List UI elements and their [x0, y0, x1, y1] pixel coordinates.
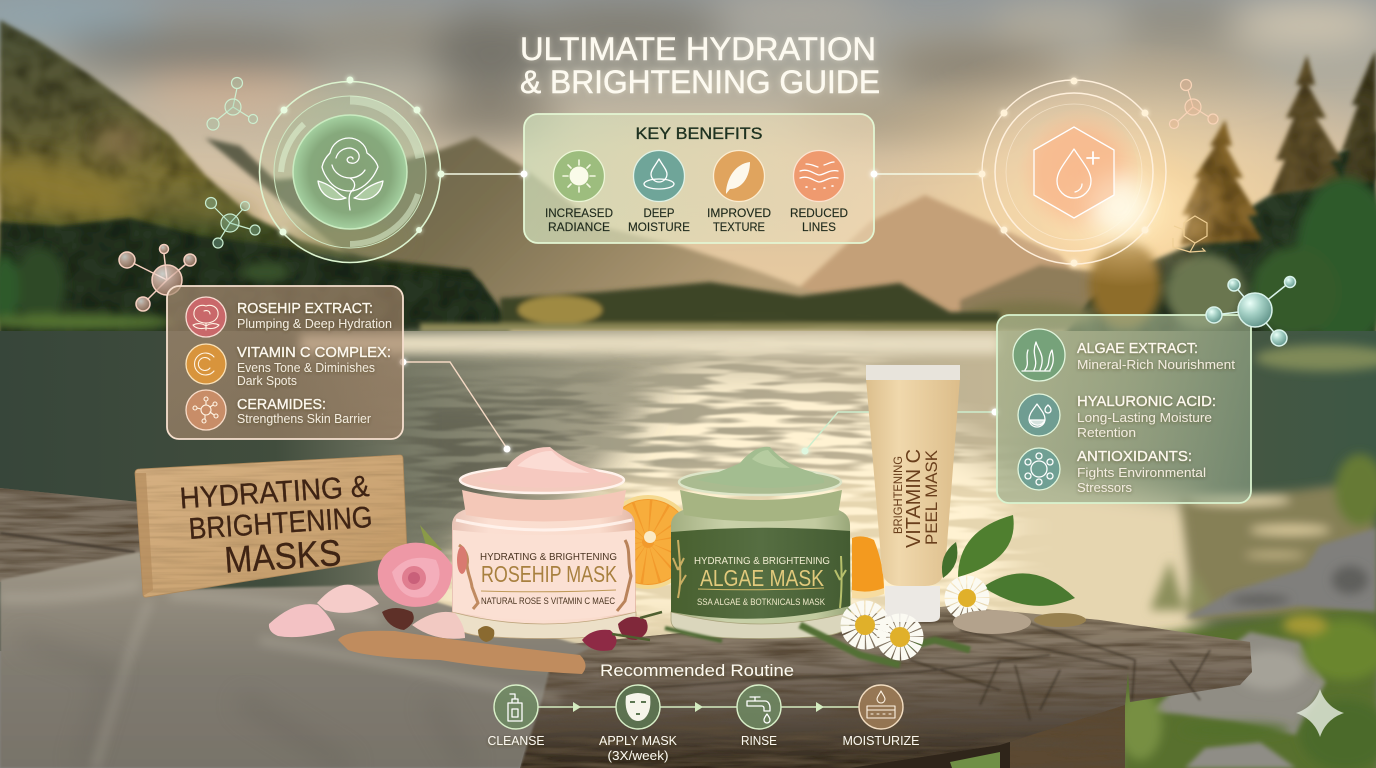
icon: reduced lines [794, 150, 844, 202]
molecule: hexagon ring [1173, 216, 1207, 252]
ring nodes [978, 78, 1148, 266]
jar: algae mask [671, 447, 851, 638]
text: ingredients: Strengthens Skin Barrier [237, 412, 371, 426]
icon: texture feather [714, 150, 764, 202]
text: ingredients: Plumping & Deep Hydration [237, 317, 392, 331]
tube text: BRIGHTENING [893, 456, 905, 534]
left forested mountain [0, 20, 510, 335]
icon: rose [318, 138, 383, 210]
emblem: hexagon droplet [978, 78, 1166, 266]
tube text [893, 449, 941, 548]
icon: antioxidants [1018, 448, 1060, 490]
molecule: teal glass [1206, 276, 1296, 346]
text: ingredients: ALGAE EXTRACT: [1077, 340, 1198, 357]
icon: droplet in hexagon [1034, 127, 1114, 218]
labels: benefits: DEEP [644, 206, 674, 220]
rosehip label: ROSEHIP MASK [481, 561, 618, 587]
molecule: top left [207, 78, 258, 130]
icon: rinse faucet [737, 685, 781, 729]
panel: algae ingredients [997, 315, 1251, 503]
leaves [958, 515, 1014, 577]
routine labels: (3X/week) [608, 748, 668, 763]
labels: benefits: LINES [802, 220, 836, 234]
right forest [965, 50, 1376, 347]
icon: moisture drop [634, 150, 684, 202]
linen cloth [0, 552, 590, 768]
petals [269, 604, 335, 637]
text: ingredients [1077, 340, 1236, 495]
icon: ceramides [186, 390, 226, 430]
sparkle mark [1296, 689, 1344, 737]
wooden spoon [338, 631, 586, 674]
routine heading: Recommended Routine [600, 661, 794, 680]
tube text: VITAMIN C [903, 449, 925, 548]
clouds [0, 0, 1376, 204]
text: ingredients: CERAMIDES: [237, 396, 326, 413]
algae label: SSA ALGAE & BOTKNICALS MASK [697, 597, 826, 608]
labels: benefits: TEXTURE [713, 220, 765, 234]
text: ingredients: HYALURONIC ACID: [1077, 393, 1216, 410]
far shoreline trees [420, 282, 1000, 332]
text: ingredients: Fights Environmental [1077, 466, 1206, 480]
connector lines between emblems and benefits [441, 173, 982, 175]
tube text: PEEL MASK [922, 449, 941, 545]
labels: benefits: MOISTURE [628, 220, 690, 234]
sign text [179, 470, 376, 583]
algae label: HYDRATING & BRIGHTENING [694, 555, 830, 567]
routine labels: RINSE [741, 733, 777, 748]
routine labels: CLEANSE [488, 733, 545, 748]
labels: benefits: INCREASED [545, 206, 613, 220]
panel: key benefits [520, 114, 878, 243]
distant mountains [205, 137, 1120, 330]
labels: benefits: RADIANCE [548, 220, 610, 234]
jar: rosehip mask [452, 447, 636, 638]
text: ingredients: Long-Lasting Moisture [1077, 411, 1212, 425]
title: ULTIMATE HYDRATION [520, 31, 876, 67]
text: ingredients: Dark Spots [237, 374, 297, 388]
connector: left panel to rosehip jar [400, 358, 510, 452]
orange slices [601, 495, 884, 598]
icon: vitamin c [186, 344, 226, 384]
text: ingredients: ANTIOXIDANTS: [1077, 448, 1192, 465]
icon: hyaluronic drop [1018, 394, 1060, 436]
rosehip label: NATURAL ROSE S VITAMIN C MAEC [481, 596, 615, 607]
routine arrows [538, 702, 859, 712]
algae label [671, 528, 850, 619]
rosehip label: HYDRATING & BRIGHTENING [480, 551, 617, 563]
daisies [848, 583, 982, 653]
icon: radiance sun [554, 150, 604, 202]
ring nodes [280, 76, 444, 236]
icon: moisturize [859, 685, 903, 729]
lower right water reflection [1150, 454, 1376, 620]
text: ingredients: ROSEHIP EXTRACT: [237, 300, 373, 317]
routine labels: MOISTURIZE [842, 733, 920, 748]
icon: cleanse bottle [494, 685, 538, 729]
icon: apply mask [616, 685, 660, 729]
routine labels: APPLY MASK [599, 733, 677, 748]
title: & BRIGHTENING GUIDE [520, 64, 880, 100]
left wooden planks [0, 488, 140, 582]
rosehip label [453, 530, 635, 620]
rose [378, 525, 452, 607]
molecule: pink glass [119, 244, 196, 311]
dried buds and herb sprigs [382, 608, 970, 665]
wooden sign [135, 455, 407, 597]
labels: benefits: IMPROVED [707, 206, 771, 220]
lake water [0, 331, 1376, 651]
water ripples [420, 365, 1010, 620]
title [520, 31, 880, 100]
text: ingredients: Stressors [1077, 481, 1132, 495]
molecule: mid left [206, 198, 260, 248]
heading: key benefits: KEY BENEFITS [636, 124, 762, 143]
routine labels [488, 733, 920, 763]
stones [953, 610, 1031, 634]
labels: benefits [545, 206, 848, 234]
panel: rosehip ingredients [167, 286, 403, 439]
text: ingredients: VITAMIN C COMPLEX: [237, 344, 391, 361]
sun glitter base on the water [360, 470, 1200, 650]
emblem: rose [260, 76, 444, 262]
text: ingredients: Mineral-Rich Nourishment [1077, 358, 1236, 372]
connector: right panel to algae tube [802, 408, 998, 454]
text: ingredients: Evens Tone & Diminishes [237, 361, 375, 375]
right bank: rocks and foliage [1118, 528, 1376, 768]
table wood [520, 606, 1252, 768]
text: ingredients: Retention [1077, 426, 1136, 440]
sign text: BRIGHTENING [188, 501, 373, 546]
sign text: HYDRATING & [179, 470, 370, 516]
algae label: ALGAE MASK [700, 565, 825, 591]
molecule: top right [1170, 80, 1218, 128]
labels: benefits: REDUCED [790, 206, 848, 220]
icon: algae [1013, 329, 1065, 381]
icon: rose [186, 297, 226, 337]
section: recommended routine [488, 661, 920, 763]
sign text: MASKS [223, 532, 342, 581]
tube: vitamin c peel mask [866, 365, 960, 622]
text: ingredients [237, 300, 392, 426]
props: rose, petals, spoon, flowers, stone [269, 515, 1086, 674]
